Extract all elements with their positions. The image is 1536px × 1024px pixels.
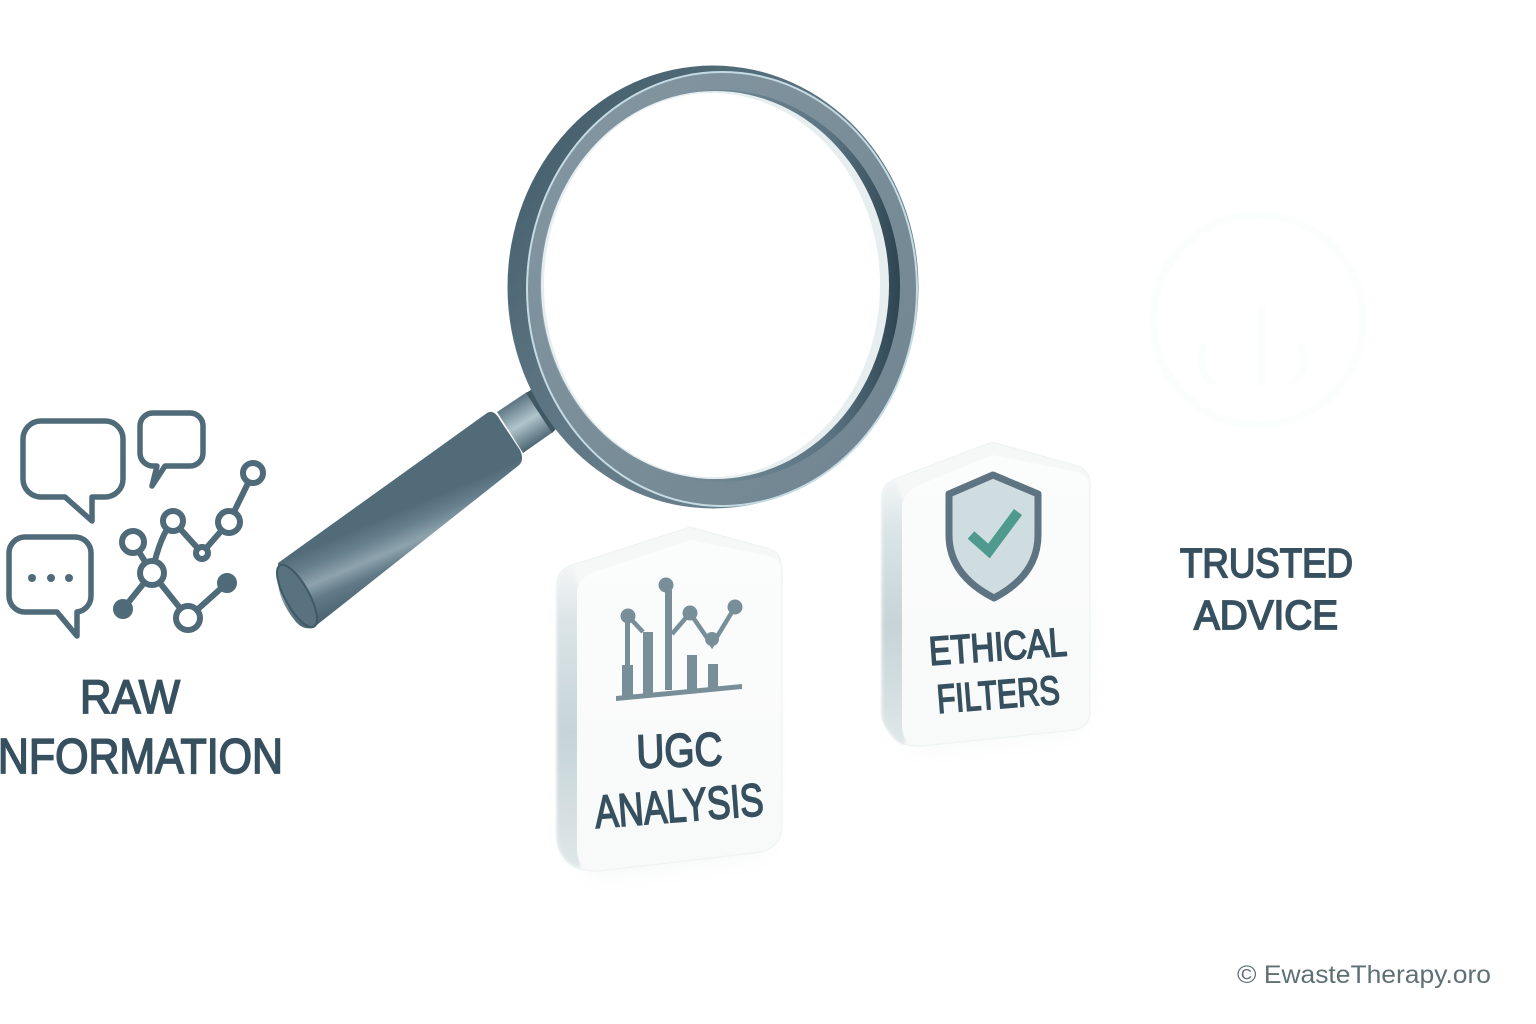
card label: ANALYSIS <box>593 773 765 838</box>
magnifier lens <box>544 93 880 477</box>
heading: trusted advice: ADVICE <box>1194 592 1338 638</box>
card side <box>882 480 905 745</box>
icon: faint trusted advice watermark <box>1153 215 1363 425</box>
panel: ethical filters card <box>882 442 1090 746</box>
card label <box>928 620 1068 722</box>
icon: chart <box>616 578 742 701</box>
icon: large speech bubble <box>23 421 123 521</box>
magnifier handle <box>270 388 560 632</box>
copyright credit: © EwasteTherapy.oro <box>1237 961 1491 989</box>
heading: trusted advice: TRUSTED <box>1180 540 1353 586</box>
heading: raw information: RAW <box>80 670 181 723</box>
heading: raw information <box>0 670 283 784</box>
icon: shield with check <box>949 475 1038 598</box>
icon: magnifying glass <box>270 66 918 632</box>
icon: small speech bubble <box>140 413 203 486</box>
card label: ETHICAL <box>928 620 1068 674</box>
card front <box>577 540 781 870</box>
card label: UGC <box>635 722 723 778</box>
card label: FILTERS <box>935 668 1061 722</box>
icon: raw information speech bubbles and network <box>9 413 263 636</box>
card body outline <box>882 442 1090 746</box>
heading: trusted advice <box>1180 540 1353 638</box>
card body outline <box>557 527 782 871</box>
panel: UGC analysis card <box>557 527 782 872</box>
card side <box>557 566 580 868</box>
icon: data network <box>116 463 263 630</box>
card front <box>902 455 1089 745</box>
card label <box>593 722 765 838</box>
icon: speech bubble with dots <box>9 537 91 636</box>
magnifier ring <box>508 66 918 508</box>
